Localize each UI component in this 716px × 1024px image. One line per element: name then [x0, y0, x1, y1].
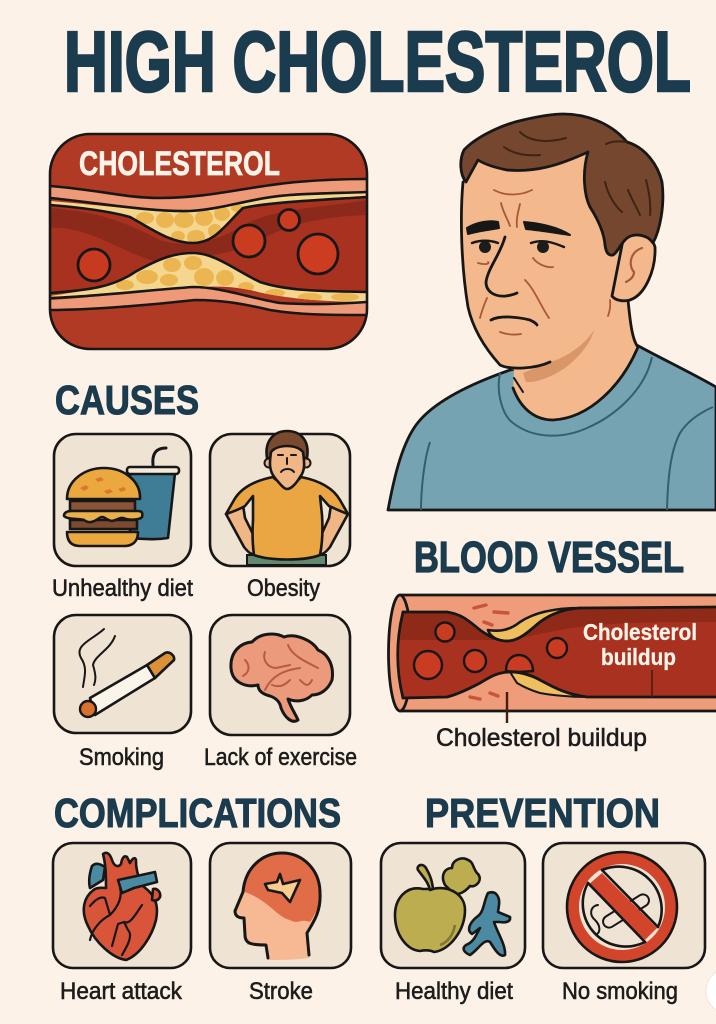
cell 3 — [464, 650, 486, 672]
man hair — [461, 114, 663, 255]
blood cell 3 — [278, 210, 300, 230]
diagram: blood vessel — [388, 595, 716, 723]
heading: causes: CAUSES — [55, 377, 199, 423]
cell 5 — [547, 638, 567, 658]
man eyes — [472, 241, 564, 247]
man skin — [461, 150, 640, 420]
panel: stroke — [210, 843, 351, 968]
label: stroke: Stroke — [249, 978, 313, 1005]
icon: head profile — [235, 853, 320, 960]
man ear — [612, 234, 655, 301]
label: heart attack: Heart attack — [60, 978, 183, 1005]
label: healthy diet: Healthy diet — [395, 978, 513, 1005]
heading: complications: COMPLICATIONS — [54, 790, 341, 836]
man eyebrows — [467, 221, 570, 235]
icon: brain burst — [265, 874, 300, 902]
label: obesity: Obesity — [247, 575, 320, 602]
vessel label in white: buildup — [601, 644, 676, 670]
icon: runner — [464, 892, 510, 956]
yellow plaque bottom — [510, 672, 587, 697]
icon: broccoli — [443, 858, 480, 894]
blood cell 2 — [233, 225, 265, 257]
vessel label in white: Cholesterol — [583, 619, 697, 645]
icon: cigarette behind sign — [591, 892, 651, 934]
icon: heart — [84, 853, 160, 960]
blood cell 1 — [78, 249, 110, 281]
heading: prevention: PREVENTION — [425, 790, 660, 836]
panel: no smoking — [543, 843, 705, 968]
icon: cigarette — [80, 653, 174, 717]
icon: arms — [226, 505, 348, 554]
vessel label in white — [583, 619, 697, 670]
panel: artery illustration — [50, 134, 367, 349]
icon: smoke — [79, 629, 115, 687]
icon: soft drink cup — [127, 448, 179, 539]
label: smoking: Smoking — [79, 744, 164, 771]
cell 2 — [414, 651, 442, 679]
blood cell 4 — [298, 234, 338, 274]
label: lack of exercise: Lack of exercise — [204, 744, 357, 771]
icon: apple — [395, 865, 465, 952]
icon: hair and head — [264, 431, 310, 489]
man nose — [486, 237, 517, 296]
panel: smoking — [54, 615, 191, 733]
icon: pants — [247, 555, 326, 565]
label: cholesterol buildup: Cholesterol buildup — [436, 724, 647, 752]
panel: healthy diet — [381, 843, 525, 968]
corner badge — [706, 968, 716, 1014]
cell 4 — [506, 655, 533, 672]
label: no smoking: No smoking — [562, 978, 678, 1005]
panel: heart attack — [53, 843, 191, 968]
icon: burger — [64, 468, 142, 546]
vessel opening — [388, 595, 412, 711]
man wrinkles — [478, 190, 610, 335]
panel: lack of exercise — [210, 615, 350, 735]
icon: prohibition sign — [567, 852, 677, 962]
illustration: worried man — [388, 114, 716, 510]
man mouth — [491, 317, 537, 325]
pointer line — [506, 692, 508, 723]
icon: brain — [231, 634, 332, 721]
icon: shirt — [226, 477, 348, 560]
cell 1 — [436, 622, 454, 642]
panel: obesity — [210, 431, 350, 566]
man shirt — [388, 343, 716, 510]
label: unhealthy diet: Unhealthy diet — [52, 575, 193, 602]
artery label: CHOLESTEROL — [79, 145, 280, 183]
jaw shadow — [523, 330, 594, 382]
yellow plaque top — [488, 608, 580, 641]
panel: unhealthy diet — [54, 434, 191, 566]
